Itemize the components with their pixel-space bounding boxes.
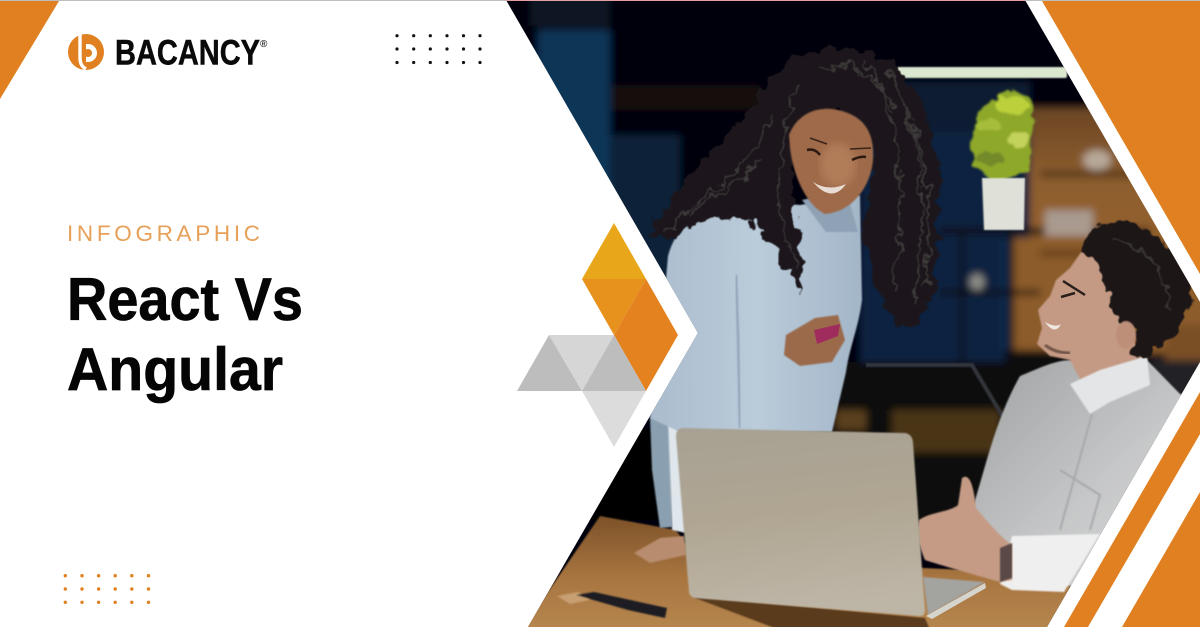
plant pot <box>982 178 1025 230</box>
title: React Vs <box>67 266 303 333</box>
title <box>67 266 303 403</box>
face <box>789 109 873 214</box>
table shadow under laptop <box>690 596 930 627</box>
shirt tail <box>668 420 686 533</box>
hand on table <box>634 536 686 563</box>
woman <box>634 46 940 563</box>
background chair frame <box>866 365 1006 422</box>
laptop <box>676 428 986 619</box>
triangle cluster <box>517 223 678 447</box>
jeans <box>650 417 672 528</box>
hair <box>652 46 940 330</box>
shirt <box>974 359 1182 587</box>
man <box>918 221 1200 592</box>
dot grid: bottom <box>64 574 150 604</box>
photo: two colleagues at a laptop <box>490 0 1200 627</box>
top edge line <box>0 0 1200 1</box>
right orange stripe: middle <box>1064 392 1200 627</box>
sweater <box>650 195 862 432</box>
right orange panel: bottom <box>1122 492 1200 627</box>
logo mark <box>68 34 104 70</box>
logo wordmark: BACANCY <box>115 34 260 72</box>
registered mark: ® <box>260 39 268 50</box>
eyebrow label: INFOGRAPHIC <box>67 221 260 246</box>
neck and face <box>1036 250 1143 380</box>
title: Angular <box>67 336 283 403</box>
potted plant <box>972 88 1034 178</box>
ear <box>1116 321 1136 349</box>
ceiling light bar <box>897 67 1067 78</box>
hand holding phone <box>784 315 845 366</box>
cuff <box>1000 534 1100 592</box>
collar <box>1070 356 1150 414</box>
right orange panel: top <box>1042 1 1200 274</box>
hair <box>1084 221 1192 358</box>
table cable port <box>557 592 667 618</box>
gesturing hand <box>918 477 1012 582</box>
logo: Bacancy <box>68 34 268 72</box>
tattoo <box>1000 543 1012 582</box>
corner triangle <box>0 1 59 99</box>
collar <box>802 198 858 232</box>
photo background: dark office <box>490 0 1200 627</box>
table <box>515 516 1070 627</box>
dot grid: top <box>395 34 482 64</box>
shirt placket and pocket <box>1060 414 1100 530</box>
